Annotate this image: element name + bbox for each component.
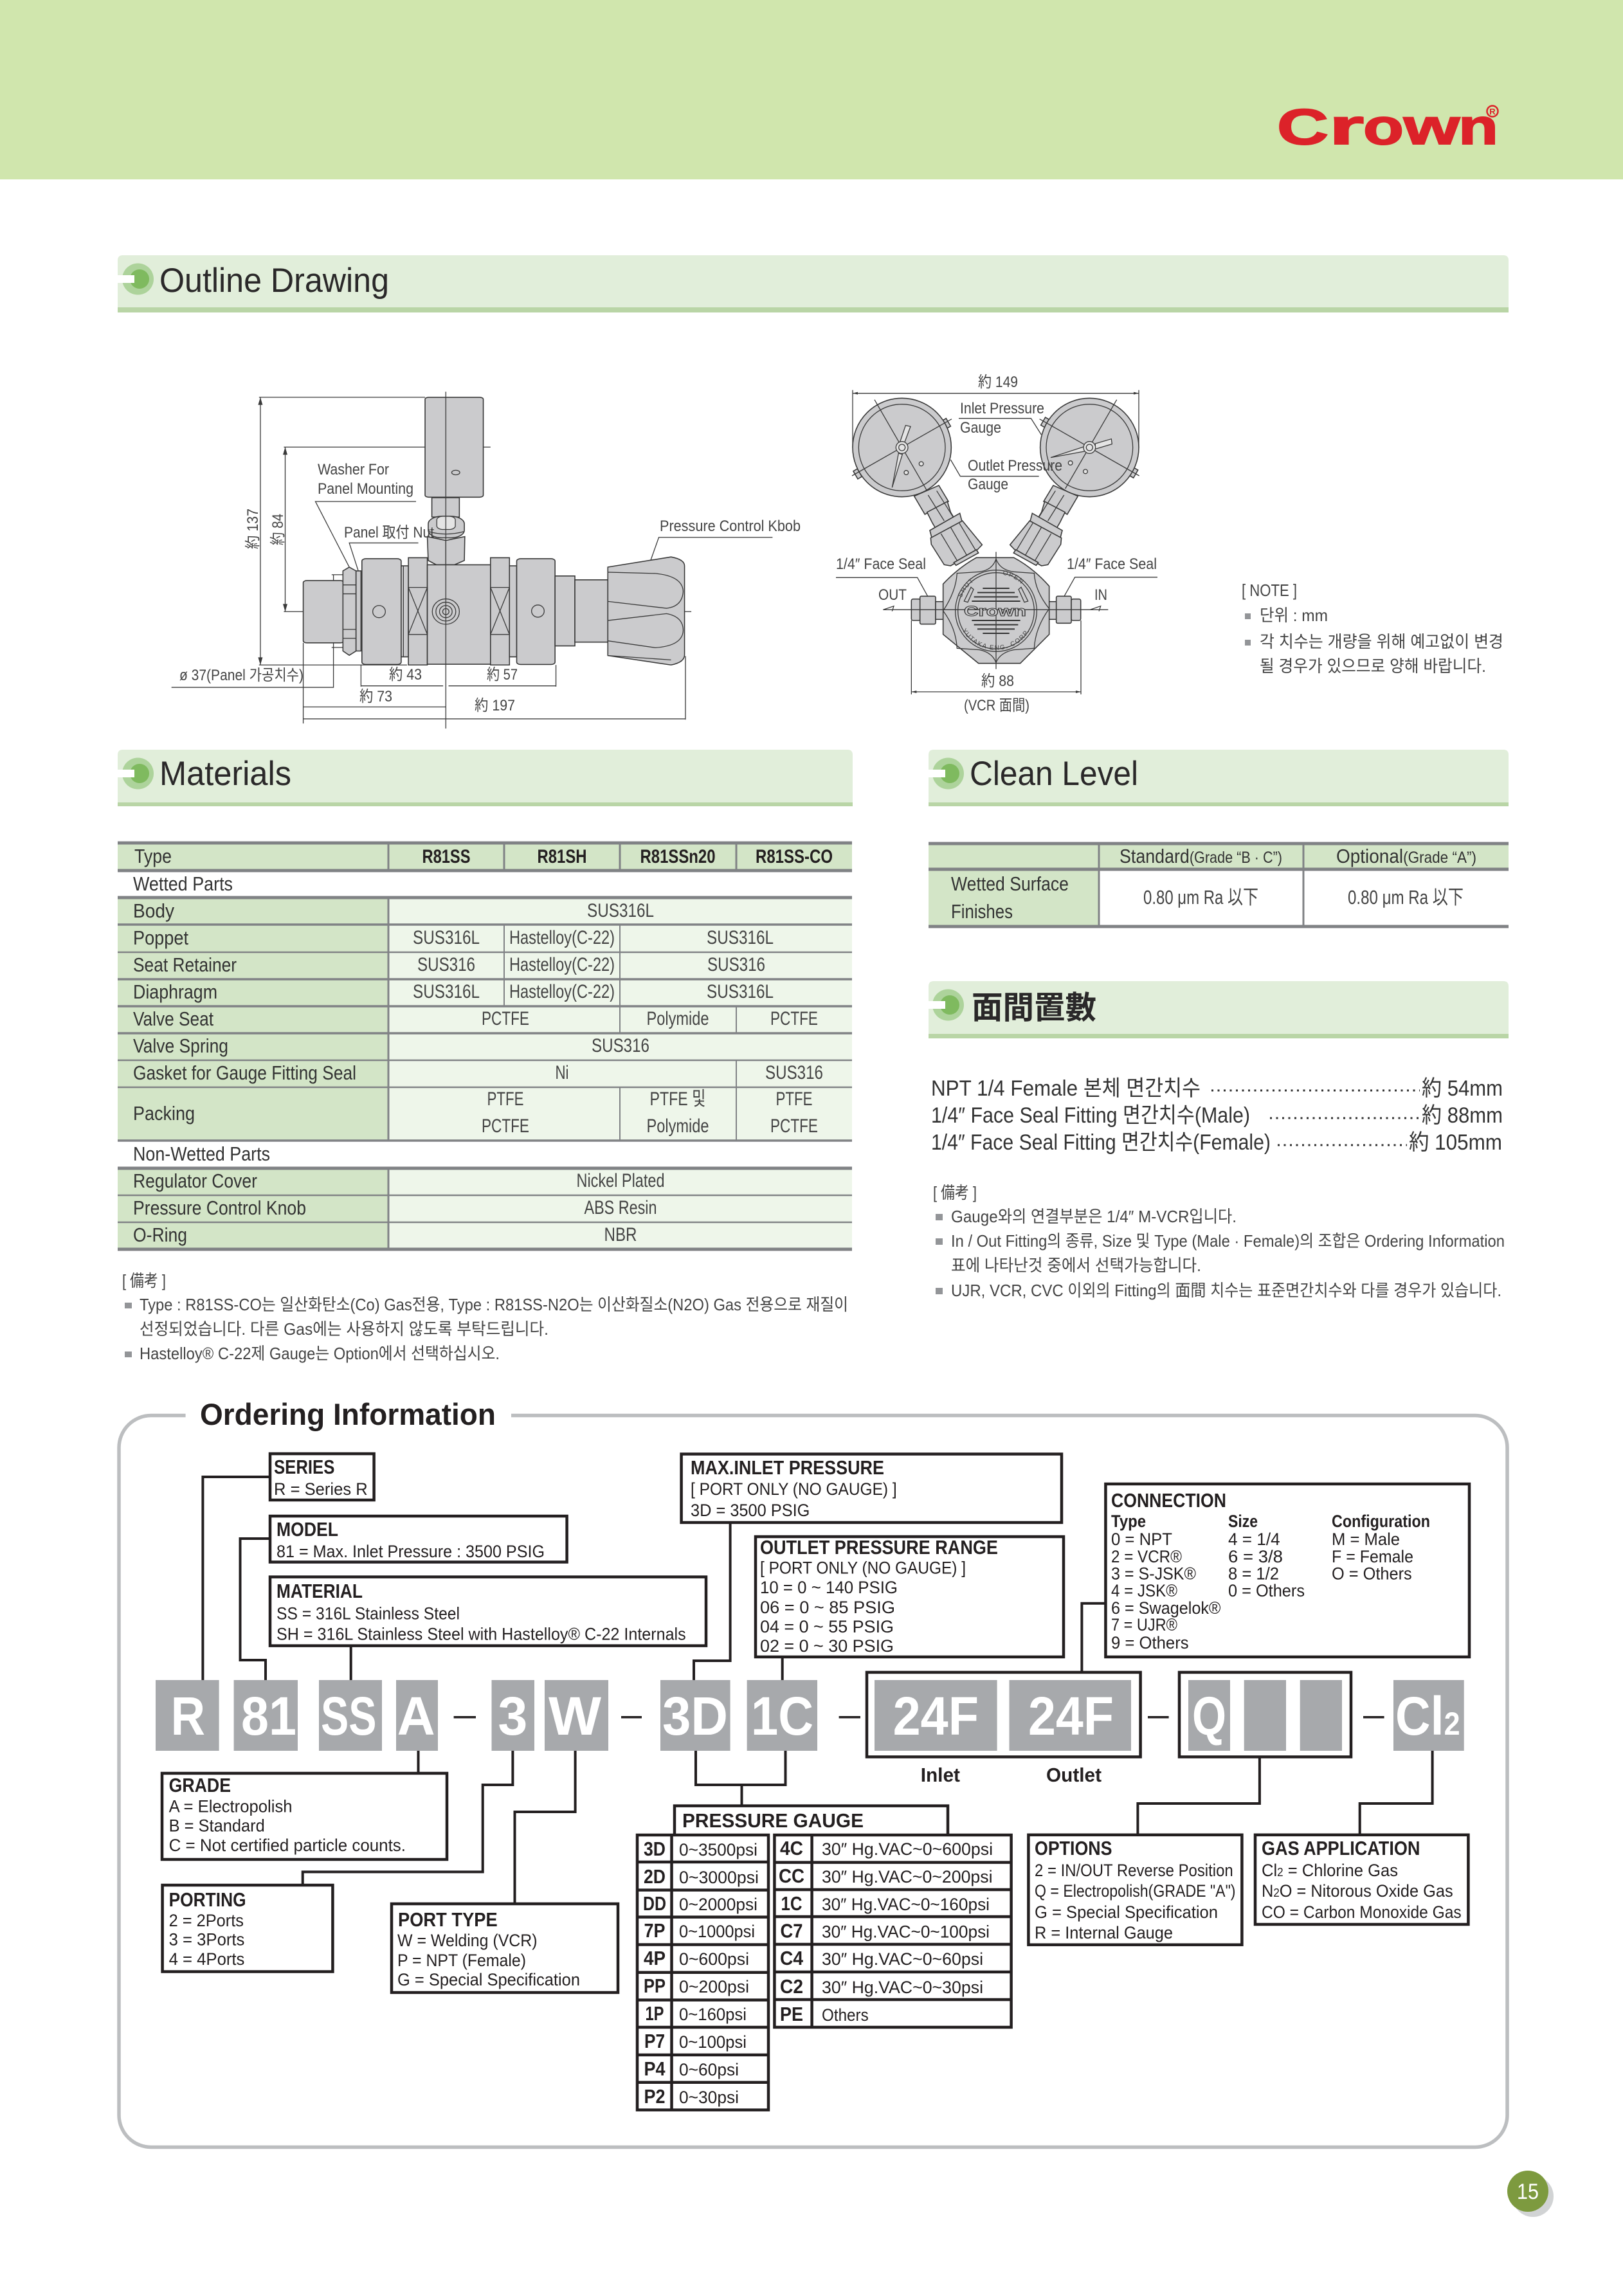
series box <box>270 1454 374 1500</box>
material values: SUS316L <box>707 927 774 948</box>
left gauge table <box>637 1835 768 2110</box>
left gauge table: 0~100psi <box>679 2032 747 2052</box>
right gauge table <box>774 1835 1011 2027</box>
leader lines <box>836 419 1157 596</box>
part number code blocks: Inlet <box>921 1764 960 1786</box>
connection type column: 6 = Swagelok® <box>1111 1598 1221 1618</box>
material values: PTFE 및 <box>649 1089 706 1110</box>
porting box: 3 = 3Ports <box>169 1930 244 1949</box>
front view labels: 約 149 <box>978 374 1018 391</box>
heading: 面間置數 <box>929 981 1509 1038</box>
max inlet pressure box: MAX.INLET PRESSURE <box>691 1456 884 1479</box>
left gauge stem and nut <box>914 485 982 566</box>
table rules <box>118 843 852 1249</box>
materials footnotes: 선정되었습니다. 다른 Gas에는 사용하지 않도록 부탁드립니다. <box>140 1319 549 1339</box>
front view labels: Inlet Pressure <box>960 400 1044 417</box>
material values: SUS316L <box>707 981 774 1002</box>
porting box: 4 = 4Ports <box>169 1949 244 1969</box>
material values: Polymide <box>647 1008 709 1029</box>
pressure gauge tables: PRESSURE GAUGE <box>682 1809 864 1832</box>
header row: R81SS <box>422 846 471 867</box>
left gauge table: 7P <box>644 1919 665 1942</box>
logo: Crown <box>1277 98 1498 155</box>
options box: OPTIONS <box>1035 1837 1112 1859</box>
front view labels: 1/4″ Face Seal <box>1067 556 1157 573</box>
left gauge table: 3D <box>644 1838 666 1860</box>
row labels: O-Ring <box>133 1224 187 1246</box>
right gauge table: C7 <box>781 1920 802 1942</box>
heading: Outline Drawing: Outline Drawing <box>159 262 389 300</box>
grade box: B = Standard <box>169 1816 265 1836</box>
material values: PCTFE <box>770 1008 818 1029</box>
material values: PCTFE <box>482 1116 529 1137</box>
material box: SH = 316L Stainless Steel with Hastelloy® C-22 Internals <box>277 1625 686 1644</box>
face-to-face footnotes: UJR, VCR, CVC 이외의 Fitting의 面間 치수는 표준면간치수와 다를 경우가 있습니다. <box>951 1281 1501 1300</box>
left gauge table: 2D <box>644 1865 666 1888</box>
connection size column <box>1228 1512 1305 1600</box>
series box: SERIES <box>274 1456 334 1478</box>
heading: Outline Drawing <box>118 255 1509 312</box>
left gauge table: P7 <box>644 2030 665 2052</box>
fittings <box>911 596 1081 624</box>
outlet pressure range box: 10 = 0 ~ 140 PSIG <box>760 1578 898 1597</box>
left gauge table: 0~200psi <box>679 1977 749 1996</box>
porting box <box>163 1885 332 1971</box>
face-to-face dimensions list: NPT 1/4 Female 본체 면간치수 <box>931 1076 1201 1101</box>
note block: [ NOTE ] <box>1242 581 1297 600</box>
front view labels: 約 88 <box>981 673 1014 690</box>
row labels: Regulator Cover <box>133 1170 257 1192</box>
material values: SUS316L <box>587 900 654 921</box>
material box: SS = 316L Stainless Steel <box>277 1604 460 1623</box>
right gauge table: C2 <box>780 1975 803 1998</box>
right gauge table: 30″ Hg.VAC~0~600psi <box>822 1840 993 1859</box>
face-to-face dimensions list: 約 88mm <box>1422 1103 1503 1128</box>
left gauge table: P4 <box>644 2057 666 2080</box>
grade box: A = Electropolish <box>169 1796 293 1816</box>
front view labels: (VCR 面間) <box>964 697 1029 714</box>
porting box: PORTING <box>169 1888 246 1911</box>
left gauge table: P2 <box>644 2085 665 2108</box>
outline drawing: front view <box>836 374 1157 714</box>
clean level table: Standard(Grade “B · C”) <box>1120 845 1282 867</box>
material values: Hastelloy(C-22) <box>509 927 615 948</box>
page number badge: 15 <box>1517 2180 1539 2204</box>
right gauge table: 1C <box>781 1892 802 1915</box>
materials footnotes: [ 備考 ] <box>122 1271 166 1290</box>
materials footnotes: Type : R81SS-CO는 일산화탄소(Co) Gas전용, Type : R81SS-N2O는 이산화질소(N2O) Gas 전용으로 재질이 <box>140 1295 848 1314</box>
outlet pressure range box: 04 = 0 ~ 55 PSIG <box>760 1617 894 1636</box>
face-to-face footnotes: In / Out Fitting의 종류, Size 및 Type (Male · Female)의 조합은 Ordering Information <box>951 1231 1505 1251</box>
clean level table <box>929 843 1509 928</box>
row labels: Poppet <box>133 927 188 949</box>
right gauge table: 30″ Hg.VAC~0~100psi <box>822 1922 990 1942</box>
material box: MATERIAL <box>277 1580 363 1602</box>
connection configuration column: F = Female <box>1332 1547 1413 1566</box>
part number code blocks: Outlet <box>1046 1764 1102 1786</box>
connection configuration column: O = Others <box>1332 1564 1412 1584</box>
outline drawing: side view <box>172 392 801 728</box>
max inlet pressure box <box>682 1454 1062 1523</box>
face-to-face footnotes: Gauge와의 연결부분은 1/4″ M-VCR입니다. <box>951 1207 1237 1226</box>
connection size column: 8 = 1/2 <box>1228 1564 1279 1584</box>
side view labels: ø 37(Panel 가공치수) <box>179 667 304 684</box>
material values: SUS316 <box>592 1035 649 1056</box>
row labels: Packing <box>133 1102 195 1125</box>
pressure gauge tables <box>637 1806 1011 2110</box>
header row: R81SSn20 <box>640 846 715 867</box>
port type box: W = Welding (VCR) <box>397 1931 538 1950</box>
model box: MODEL <box>277 1518 338 1541</box>
heading: 面間置數: 面間置數 <box>972 991 1096 1026</box>
regulator body: OPEN <box>1003 571 1024 584</box>
model box <box>270 1516 567 1562</box>
front view labels: 1/4″ Face Seal <box>836 556 926 573</box>
gas application box: Cl2 = Chlorine Gas <box>1262 1861 1398 1880</box>
part number code blocks: A <box>397 1686 435 1746</box>
connection configuration column: Configuration <box>1332 1512 1430 1531</box>
connection box <box>1105 1484 1469 1657</box>
right gauge table: CC <box>779 1865 804 1887</box>
outlet pressure range box: OUTLET PRESSURE RANGE <box>760 1536 998 1559</box>
right gauge table: 30″ Hg.VAC~0~200psi <box>822 1867 993 1886</box>
part number code blocks: 3D <box>662 1686 728 1746</box>
options box <box>1028 1835 1242 1945</box>
logo: Crown: r <box>1329 98 1364 155</box>
gas application box: CO = Carbon Monoxide Gas <box>1262 1903 1462 1922</box>
right gauge stem and nut <box>1010 485 1078 566</box>
clean level table: Wetted Surface <box>951 872 1069 895</box>
gas application box: GAS APPLICATION <box>1262 1837 1420 1859</box>
row labels: Valve Spring <box>133 1035 228 1057</box>
material values: PCTFE <box>482 1008 529 1029</box>
connection size column: Size <box>1228 1512 1258 1531</box>
regulator body: YUTAKA ENG. CORP. <box>963 628 1029 650</box>
part number code blocks: SS <box>321 1686 377 1746</box>
gas application box: N2O = Nitorous Oxide Gas <box>1262 1881 1453 1901</box>
logo: Crown: R <box>1489 107 1496 116</box>
connection size column: 6 = 3/8 <box>1228 1547 1283 1566</box>
left gauge table: 4P <box>644 1947 666 1969</box>
connection type column: 7 = UJR® <box>1111 1615 1177 1634</box>
grade box: GRADE <box>169 1774 231 1796</box>
front view labels: Gauge <box>968 476 1008 493</box>
materials footnotes: Hastelloy® C-22제 Gauge는 Option에서 선택하십시오. <box>140 1344 500 1363</box>
max inlet pressure box: [ PORT ONLY (NO GAUGE) ] <box>691 1479 897 1499</box>
options box: R = Internal Gauge <box>1035 1923 1173 1942</box>
right gauge table: 30″ Hg.VAC~0~60psi <box>822 1949 983 1969</box>
material box <box>270 1577 706 1646</box>
face-to-face dimensions list: 約 54mm <box>1422 1076 1503 1101</box>
connection type column <box>1111 1512 1221 1652</box>
row labels: Diaphragm <box>133 981 217 1003</box>
material values: Nickel Plated <box>576 1170 665 1191</box>
materials footnotes <box>122 1271 848 1363</box>
material values: Polymide <box>647 1116 709 1137</box>
left gauge table: 0~30psi <box>679 2088 739 2107</box>
material values: Ni <box>556 1062 568 1083</box>
connection type column: 2 = VCR® <box>1111 1547 1182 1566</box>
left gauge table: 0~3000psi <box>679 1868 759 1887</box>
left gauge <box>852 398 952 497</box>
logo: Crown: C <box>1277 98 1328 155</box>
front view labels: IN <box>1094 586 1107 604</box>
ordering heading: Ordering Information <box>200 1397 496 1431</box>
material values: PTFE <box>487 1089 523 1110</box>
connection type column: 9 = Others <box>1111 1633 1189 1652</box>
side view labels: 約 43 <box>389 666 422 683</box>
header row <box>134 845 833 867</box>
series box: R = Series R <box>274 1479 368 1499</box>
port type box: P = NPT (Female) <box>397 1951 526 1970</box>
material values: SUS316L <box>413 927 480 948</box>
left gauge table: PP <box>644 1975 666 1997</box>
table cell fills <box>118 843 852 1249</box>
face-to-face dimensions list <box>931 1076 1503 1155</box>
left gauge table: 0~600psi <box>679 1949 749 1969</box>
connection configuration column: M = Male <box>1332 1530 1400 1549</box>
clean level table: 0.80 μm Ra 以下 <box>1143 886 1258 908</box>
right gauge table: 30″ Hg.VAC~0~30psi <box>822 1978 983 1997</box>
left gauge table: 1P <box>646 2002 664 2025</box>
part number code blocks: 1C <box>751 1686 813 1746</box>
options box: 2 = IN/OUT Reverse Position <box>1035 1861 1233 1880</box>
row labels: Non-Wetted Parts <box>133 1143 270 1165</box>
regulator body <box>943 557 1049 664</box>
material values: SUS316 <box>707 954 765 975</box>
note block <box>1242 581 1503 676</box>
material values: PCTFE <box>770 1116 818 1137</box>
options box: G = Special Specification <box>1035 1903 1218 1922</box>
logo: Crown: n <box>1458 98 1498 155</box>
front view labels <box>836 374 1157 714</box>
connection box: CONNECTION <box>1111 1489 1226 1512</box>
material values: SUS316L <box>413 981 480 1002</box>
side view labels: Panel Mounting <box>318 480 413 498</box>
front view labels: Crown <box>964 603 1026 619</box>
right gauge table: C4 <box>780 1947 804 1969</box>
outlet pressure range box: 02 = 0 ~ 30 PSIG <box>760 1636 894 1656</box>
left gauge table: DD <box>643 1892 666 1915</box>
clean level table: 0.80 μm Ra 以下 <box>1348 886 1464 908</box>
connection size column: 0 = Others <box>1228 1581 1305 1600</box>
front view labels: Gauge <box>960 419 1001 437</box>
port type box <box>392 1904 618 1993</box>
left gauge table: 0~160psi <box>679 2005 747 2024</box>
connection type column: 3 = S-JSK® <box>1111 1564 1196 1584</box>
heading: Materials: Materials <box>159 755 291 793</box>
material values: SUS316 <box>417 954 475 975</box>
right gauge <box>1040 398 1139 497</box>
side view labels: 約 84 <box>269 514 287 545</box>
material values: ABS Resin <box>584 1197 657 1218</box>
logo: Crown: o <box>1363 98 1404 155</box>
outlet pressure range box <box>756 1536 1064 1657</box>
gas application box <box>1255 1835 1468 1924</box>
part number code blocks: 24F <box>1028 1686 1114 1746</box>
options box: Q = Electropolish(GRADE "A") <box>1035 1881 1236 1901</box>
material values: Hastelloy(C-22) <box>509 954 615 975</box>
port type box: G = Special Specification <box>397 1970 580 1989</box>
front view labels: OUT <box>878 586 907 604</box>
regulator body: SHUT <box>958 578 972 597</box>
part number code blocks: Q <box>1192 1686 1226 1746</box>
materials table <box>118 843 852 1249</box>
max inlet pressure box: 3D = 3500 PSIG <box>691 1501 810 1520</box>
row labels: Pressure Control Knob <box>133 1197 306 1219</box>
note block: 각 치수는 개량을 위해 예고없이 변경 <box>1260 632 1503 651</box>
part number code blocks: 3 <box>498 1686 527 1746</box>
row labels: Wetted Parts <box>133 872 233 895</box>
outlet pressure range box: 06 = 0 ~ 85 PSIG <box>760 1598 895 1617</box>
side view shapes <box>172 392 772 728</box>
header row: R81SS-CO <box>756 846 833 867</box>
model box: 81 = Max. Inlet Pressure : 3500 PSIG <box>277 1542 545 1561</box>
side view labels: 約 57 <box>487 666 518 683</box>
row labels <box>133 872 356 1246</box>
header row: Type <box>134 845 172 867</box>
material values: NBR <box>604 1224 637 1245</box>
clean level table: Optional(Grade “A”) <box>1336 845 1476 867</box>
material values: PTFE <box>775 1089 813 1110</box>
side view labels: 約 137 <box>244 509 262 549</box>
face-to-face footnotes <box>933 1183 1505 1300</box>
row labels: Body <box>133 899 174 922</box>
side view labels: 約 73 <box>359 688 392 705</box>
header row: R81SH <box>538 846 586 867</box>
front view shapes <box>836 390 1157 694</box>
right gauge table: Others <box>822 2005 869 2025</box>
part number code blocks: 81 <box>241 1686 296 1746</box>
note block: 될 경우가 있으므로 양해 바랍니다. <box>1260 656 1486 676</box>
connection configuration column <box>1332 1512 1430 1584</box>
logo: Crown: w <box>1403 98 1460 155</box>
connection type column: 4 = JSK® <box>1111 1581 1177 1600</box>
porting box: 2 = 2Ports <box>169 1911 244 1930</box>
row labels: Gasket for Gauge Fitting Seal <box>133 1062 356 1084</box>
material values <box>413 900 823 1245</box>
face-to-face dimensions list: 1/4″ Face Seal Fitting 면간치수(Male) <box>931 1103 1250 1128</box>
outlet pressure range box: [ PORT ONLY (NO GAUGE) ] <box>760 1559 966 1578</box>
grade box: C = Not certified particle counts. <box>169 1836 406 1855</box>
right gauge table: 4C <box>780 1837 803 1859</box>
part number code blocks <box>156 1672 1464 1786</box>
grade box <box>162 1773 447 1859</box>
row labels: Valve Seat <box>133 1008 213 1030</box>
right gauge table: PE <box>780 2003 803 2025</box>
page number badge <box>1507 2171 1554 2217</box>
port type box: PORT TYPE <box>398 1908 498 1931</box>
side view labels: Panel 取付 Nut <box>344 524 434 541</box>
part number code blocks: 24F <box>893 1686 979 1746</box>
side view labels <box>179 461 801 714</box>
part number code blocks: W <box>549 1686 602 1746</box>
front view labels: Outlet Pressure <box>968 457 1062 475</box>
left gauge table: 0~60psi <box>679 2060 739 2079</box>
heading: Materials <box>118 750 853 806</box>
face-to-face dimensions list: 約 105mm <box>1409 1130 1502 1155</box>
heading: Clean Level <box>929 750 1509 806</box>
heading: Clean Level: Clean Level <box>970 755 1138 793</box>
connectors <box>203 1477 1433 1904</box>
side view labels: Washer For <box>318 461 389 478</box>
note block: 단위 : mm <box>1260 606 1328 625</box>
centre lines and flow arrows <box>883 552 1108 669</box>
face-to-face footnotes: 표에 나타난것 중에서 선택가능합니다. <box>951 1256 1201 1275</box>
panel: ordering information <box>119 1397 1507 2147</box>
part number code blocks: Cl2 <box>1395 1686 1460 1746</box>
face-to-face footnotes: [ 備考 ] <box>933 1183 977 1202</box>
connection type column: 0 = NPT <box>1111 1530 1172 1549</box>
part number code blocks: R <box>171 1686 205 1746</box>
left gauge table: 0~1000psi <box>679 1922 755 1941</box>
header band <box>0 0 1623 179</box>
side view labels: Pressure Control Kbob <box>660 518 801 535</box>
clean level table: Finishes <box>951 900 1013 923</box>
material values: SUS316 <box>765 1062 823 1083</box>
left gauge table: 0~2000psi <box>679 1895 757 1914</box>
face-to-face dimensions list: 1/4″ Face Seal Fitting 면간치수(Female) <box>931 1130 1271 1155</box>
side view labels: 約 197 <box>475 697 515 714</box>
connection type column: Type <box>1111 1512 1146 1531</box>
material values: Hastelloy(C-22) <box>509 981 615 1002</box>
left gauge table: 0~3500psi <box>679 1840 757 1859</box>
connection size column: 4 = 1/4 <box>1228 1530 1280 1549</box>
right gauge table: 30″ Hg.VAC~0~160psi <box>822 1895 990 1914</box>
row labels: Seat Retainer <box>133 954 237 976</box>
